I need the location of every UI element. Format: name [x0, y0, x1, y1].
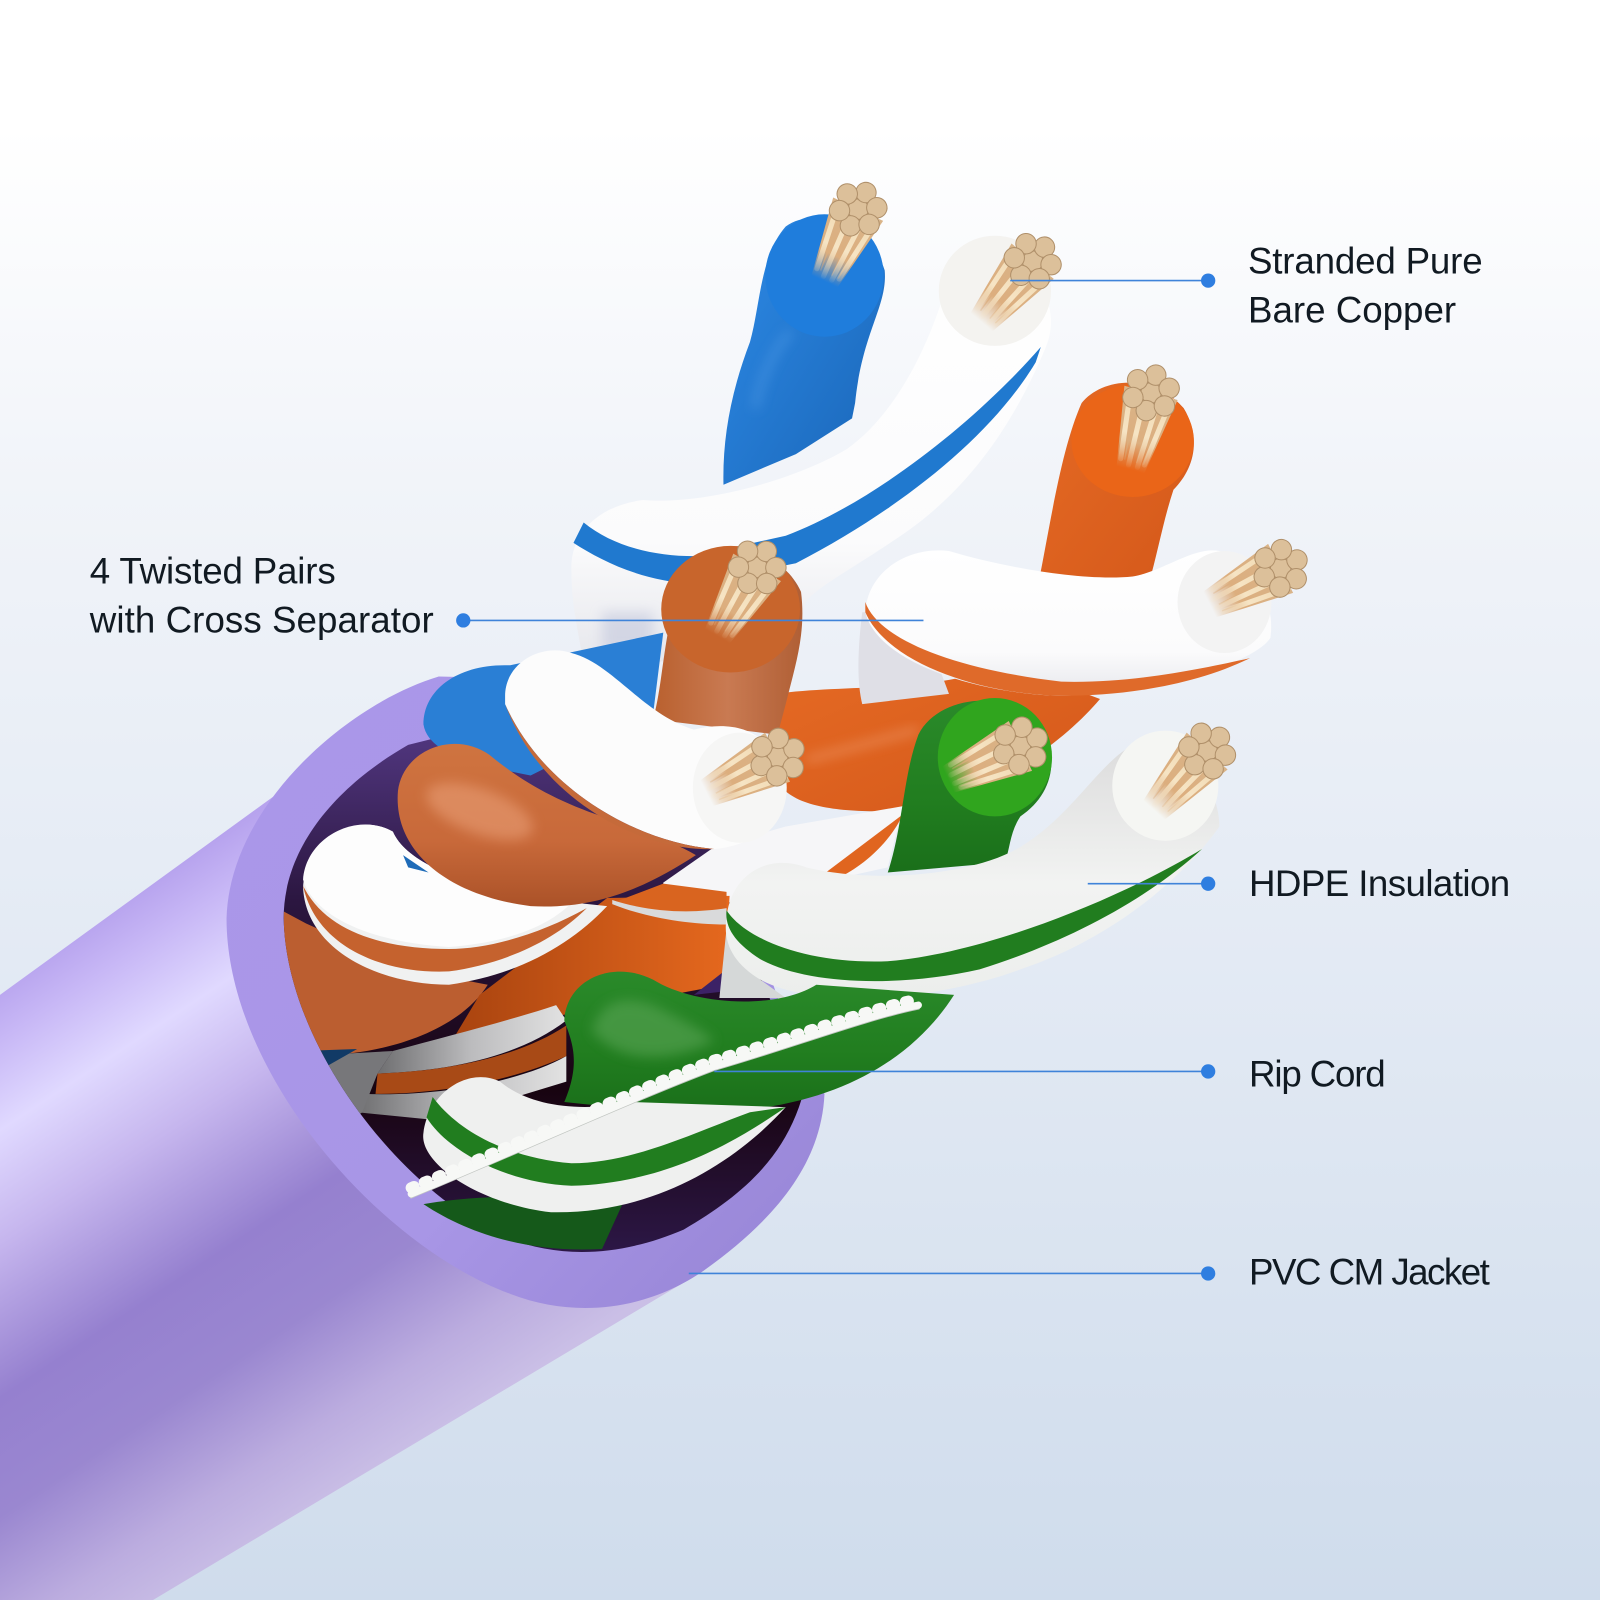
- wire: white and orange band behind centre: [663, 806, 903, 903]
- wire: white with green stripe lower: [423, 1077, 786, 1212]
- wire: blue loop: [423, 633, 663, 776]
- wire: orange middle: [776, 663, 1100, 811]
- callout: 4 Twisted Pairs with Cross Separator: 4 Twisted Pairs: [90, 551, 336, 592]
- wire: white with blue stripe: [571, 222, 1072, 663]
- orange lower: [449, 896, 730, 1046]
- callout: HDPE Insulation: [1088, 863, 1510, 904]
- wire: white with brown stripe centre: [505, 650, 816, 849]
- callout: 4 Twisted Pairs with Cross Separator: [89, 551, 923, 641]
- wire: white with green stripe right: [719, 711, 1247, 998]
- purple PVC jacket: [0, 677, 824, 1600]
- callout: HDPE Insulation: HDPE Insulation: [1249, 863, 1510, 904]
- jacket hollow: [284, 714, 806, 1252]
- rip cord: [411, 999, 918, 1197]
- jacket tube body: [0, 677, 704, 1600]
- wire: solid brown orange centre: [653, 529, 802, 735]
- wire: white with orange stripe right: [858, 531, 1319, 704]
- callout: Stranded Pure Bare Copper: [1010, 240, 1483, 330]
- wire: inner orange and bands: [278, 884, 730, 1128]
- wire: solid blue: [723, 172, 895, 485]
- callout: Stranded Pure Bare Copper: Stranded Pure: [1248, 240, 1483, 281]
- dark white and orange bands: [378, 1005, 566, 1073]
- wire: green loop: [564, 972, 954, 1112]
- purple gap: [694, 973, 722, 995]
- wire: solid orange: [1039, 358, 1194, 587]
- wire: solid green: [888, 698, 1058, 872]
- centre white and orange strip: [617, 884, 727, 910]
- wire: white with orange stripe left: [303, 824, 607, 985]
- brown-orange lower left: [278, 908, 488, 1055]
- callout: PVC CM Jacket: [689, 1252, 1490, 1293]
- wire: brown orange loop: [398, 744, 696, 907]
- jacket rim: [227, 677, 824, 1308]
- callout: Rip Cord: [714, 1054, 1386, 1095]
- callout: PVC CM Jacket: PVC CM Jacket: [1249, 1252, 1490, 1293]
- callout: 4 Twisted Pairs with Cross Separator: with Cross Separator: [89, 600, 434, 641]
- wire: dark green bottom: [423, 1196, 622, 1250]
- callout: Rip Cord: Rip Cord: [1249, 1054, 1386, 1095]
- callout: Stranded Pure Bare Copper: Bare Copper: [1248, 289, 1456, 330]
